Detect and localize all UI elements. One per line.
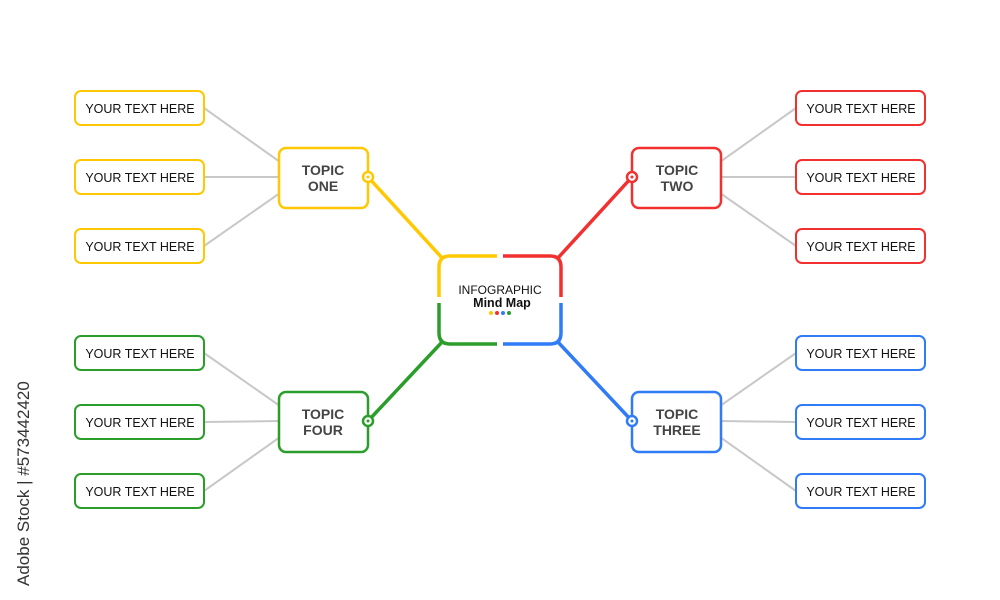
text boxes red (796, 91, 925, 263)
topic two (627, 148, 721, 208)
text boxes yellow (75, 91, 204, 263)
text boxes yellow: YOUR TEXT HERE (85, 102, 195, 116)
topic two: TWO (661, 178, 693, 194)
topic one: TOPIC (302, 162, 344, 178)
text boxes red: YOUR TEXT HERE (806, 171, 916, 185)
text boxes green: YOUR TEXT HERE (85, 416, 195, 430)
text boxes yellow: YOUR TEXT HERE (85, 240, 195, 254)
text boxes green: YOUR TEXT HERE (85, 485, 195, 499)
topic four: TOPIC (302, 406, 344, 422)
central hub: Mind Map (473, 296, 531, 310)
text boxes yellow: YOUR TEXT HERE (85, 171, 195, 185)
topic four (279, 392, 373, 452)
text boxes red: YOUR TEXT HERE (806, 240, 916, 254)
connector lines gray (204, 108, 796, 491)
central hub: INFOGRAPHIC (458, 283, 542, 297)
topic one: ONE (308, 178, 338, 194)
watermark text: Adobe Stock | #573442420 (14, 381, 33, 586)
topic one (279, 148, 373, 208)
text boxes blue: YOUR TEXT HERE (806, 485, 916, 499)
text boxes blue: YOUR TEXT HERE (806, 416, 916, 430)
text boxes blue: YOUR TEXT HERE (806, 347, 916, 361)
topic three: TOPIC (656, 406, 698, 422)
central hub (368, 177, 632, 421)
text boxes green: YOUR TEXT HERE (85, 347, 195, 361)
topic three: THREE (653, 422, 701, 438)
text boxes red: YOUR TEXT HERE (806, 102, 916, 116)
topic four: FOUR (303, 422, 343, 438)
text boxes green (75, 336, 204, 508)
topic two: TOPIC (656, 162, 698, 178)
topic three (627, 392, 721, 452)
text boxes blue (796, 336, 925, 508)
